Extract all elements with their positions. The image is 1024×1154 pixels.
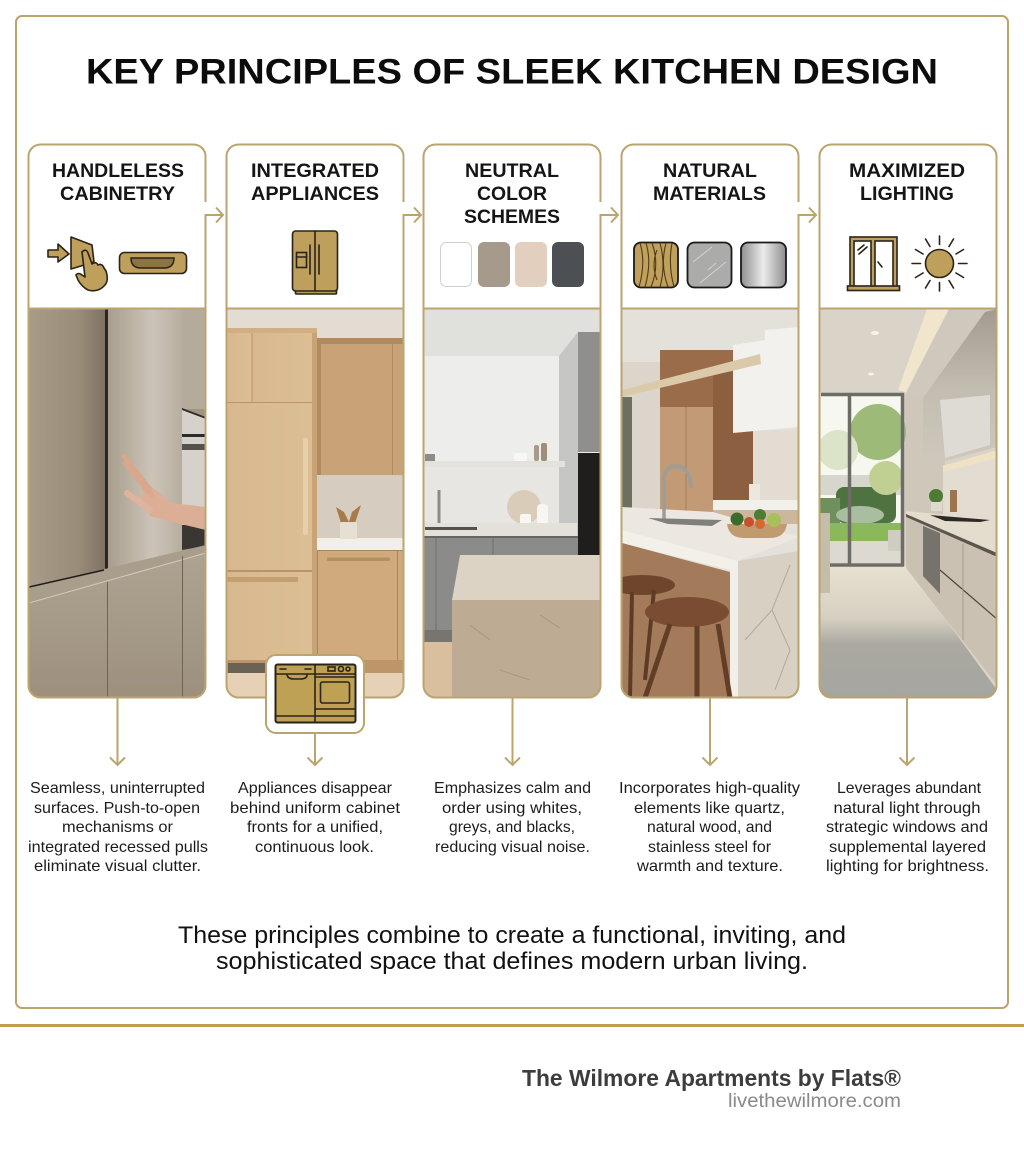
- text: handleless description: [28, 780, 208, 875]
- icon: color swatches: [440, 242, 584, 287]
- text: lighting description: natural light through: [834, 800, 980, 817]
- icon: push to open and recessed pull: [48, 237, 186, 291]
- text: color description: [434, 780, 591, 856]
- arrow: down from panel 1: [110, 698, 125, 765]
- heading: INTEGRATED: [251, 161, 379, 182]
- icon: dishwasher and oven badge: [266, 655, 364, 733]
- arrow: down from panel 3: [505, 698, 520, 765]
- title: KEY PRINCIPLES OF SLEEK KITCHEN DESIGN: [86, 52, 938, 92]
- closing statement: These principles combine to create a functional, inviting, and: [178, 922, 846, 949]
- photo: neutral grey kitchen: [424, 309, 601, 698]
- panel: natural materials: [609, 144, 799, 698]
- text: color description: Emphasizes calm and: [434, 780, 591, 797]
- hand: [124, 456, 206, 530]
- text: materials description: warmth and texture.: [636, 858, 783, 875]
- heading: HANDLELESS: [52, 161, 184, 182]
- text: appliances description: behind uniform cabinet: [230, 800, 401, 817]
- heading: NEUTRAL: [465, 161, 559, 182]
- heading: LIGHTING: [860, 184, 954, 205]
- text: handleless description: surfaces. Push-to-open: [34, 800, 200, 817]
- heading: [849, 161, 965, 205]
- text: lighting description: [826, 780, 989, 875]
- footer rule: [0, 1024, 1024, 1027]
- closing statement: sophisticated space that defines modern urban living.: [216, 948, 808, 975]
- text: lighting description: strategic windows and: [826, 819, 988, 836]
- text: color description: reducing visual noise.: [435, 839, 590, 856]
- text: appliances description: Appliances disappear: [238, 780, 393, 797]
- arrow: step 2 to 3: [401, 202, 421, 222]
- heading: MAXIMIZED: [849, 161, 965, 182]
- icon: refrigerator: [292, 231, 338, 294]
- text: lighting description: lighting for brightness.: [826, 858, 989, 875]
- heading: [52, 161, 184, 205]
- footer brand: The Wilmore Apartments by Flats®: [522, 1065, 901, 1091]
- icon: window and sun: [848, 236, 967, 291]
- heading: [251, 161, 379, 205]
- arrow: down from panel 5: [900, 698, 914, 765]
- arrow: down from panel 2: [308, 733, 322, 765]
- text: materials description: natural wood, and: [647, 819, 772, 836]
- heading: COLOR: [477, 184, 547, 205]
- photo: bright kitchen with garden door: [818, 309, 997, 698]
- arrow: down from panel 4: [702, 698, 718, 765]
- panel: maximized lighting: [818, 144, 997, 698]
- text: lighting description: supplemental layered: [829, 839, 986, 856]
- arrow: step 1 to 2: [203, 202, 223, 222]
- heading: MATERIALS: [653, 184, 766, 205]
- panel: integrated appliances: [226, 144, 404, 698]
- icon: material samples: [634, 242, 786, 288]
- text: handleless description: Seamless, uninterrupted: [30, 780, 205, 797]
- footer brand: [522, 1065, 901, 1112]
- text: color description: greys, and blacks,: [449, 819, 575, 836]
- text: handleless description: mechanisms or: [62, 819, 174, 836]
- heading: [464, 161, 560, 228]
- photo: handleless cabinet with hand: [29, 309, 206, 698]
- text: handleless description: integrated recessed pulls: [28, 839, 208, 856]
- panel: handleless cabinetry: [28, 144, 206, 698]
- text: lighting description: Leverages abundant: [837, 780, 982, 797]
- text: color description: order using whites,: [442, 800, 582, 817]
- text: handleless description: eliminate visual clutter.: [34, 858, 201, 875]
- arrow: step 3 to 4: [598, 202, 618, 222]
- text: materials description: elements like quartz,: [634, 800, 785, 817]
- text: materials description: [619, 780, 800, 875]
- panel: neutral color schemes: [424, 144, 601, 698]
- heading: SCHEMES: [464, 207, 560, 228]
- text: appliances description: [230, 780, 401, 856]
- photo: kitchen island with stools: [609, 309, 799, 698]
- text: appliances description: fronts for a unified,: [247, 819, 383, 836]
- text: materials description: stainless steel for: [648, 839, 772, 856]
- arrow: step 4 to 5: [796, 202, 816, 222]
- heading: CABINETRY: [60, 184, 175, 205]
- text: appliances description: continuous look.: [255, 839, 374, 856]
- text: materials description: Incorporates high-quality: [619, 780, 800, 797]
- photo: wood panelled kitchen: [227, 309, 404, 698]
- heading: APPLIANCES: [251, 184, 379, 205]
- footer brand: livethewilmore.com: [728, 1091, 901, 1112]
- closing statement: [178, 922, 846, 975]
- heading: NATURAL: [663, 161, 757, 182]
- heading: [653, 161, 766, 205]
